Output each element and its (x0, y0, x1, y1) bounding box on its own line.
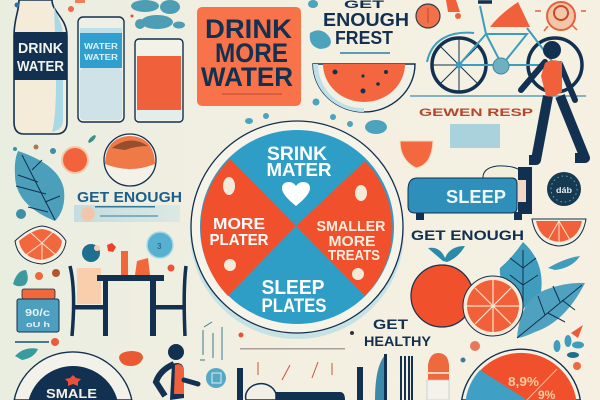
icon: water bottle (14, 0, 67, 134)
icon: fork (400, 356, 413, 400)
wheel left label: PLATER (210, 232, 269, 249)
heading: drink more water poster: WATER (201, 62, 293, 92)
icon: orange slice (463, 276, 523, 336)
pie chart: bottom right (462, 349, 580, 400)
decoration: leaves at top (14, 0, 185, 29)
wheel left label: MORE (213, 216, 265, 233)
wheel right label: SMALLER (316, 218, 386, 235)
wheel top label: SRINK (267, 144, 327, 165)
wheel top label (266, 144, 332, 180)
icon: bowl (104, 134, 156, 186)
icon: apple with leaves (411, 246, 473, 327)
icon: bed (408, 166, 532, 220)
icon: water glass: WATER (84, 53, 118, 62)
wheel right label: TREATS (328, 247, 380, 264)
icon: bicycle (410, 2, 586, 96)
icon: red heart blob (119, 351, 143, 366)
heading: drink more water poster (197, 7, 301, 106)
icon: heart (282, 182, 310, 206)
decorative dots left (13, 134, 116, 262)
icon: grapefruit half left (15, 226, 66, 264)
icon: leaf sprig (460, 325, 584, 370)
icon: jar with label: 90/c (25, 308, 51, 319)
icon: jar with label: oU h (26, 322, 50, 329)
icon: scale on bench (237, 367, 363, 400)
icon: salt shaker (427, 353, 450, 400)
wheel bottom label: PLATES (262, 296, 326, 317)
heading: get enough frest: FREST (335, 28, 393, 48)
icon: running person (156, 344, 198, 400)
icon: upper leaf right (500, 242, 542, 312)
decoration: blue blobs (245, 0, 387, 134)
decorative blobs bottom left (13, 269, 60, 360)
heading: get enough frest: ENOUGH (323, 10, 409, 30)
label: get enough right: GET ENOUGH (411, 227, 524, 243)
panel: center wheel (190, 121, 404, 339)
icon: knife (375, 354, 387, 400)
icon: water glass (78, 17, 124, 122)
icon: walking person (521, 41, 585, 160)
icon: water bottle: WATER (17, 58, 64, 75)
wheel right label: MORE (328, 233, 376, 250)
label: get enough left (74, 189, 182, 222)
icon: juice glass (135, 39, 183, 122)
label: get enough left: GET ENOUGH (77, 189, 182, 206)
wheel left label (210, 216, 269, 249)
icon: clock fruit (416, 4, 440, 28)
icon: orange circle (62, 147, 88, 173)
heading: get enough frest (323, 0, 409, 54)
icon: small watermelon (400, 141, 433, 168)
pie chart: bottom right: 8,9% (508, 374, 539, 389)
icon: water glass: WATER (84, 42, 118, 51)
wheel right label (316, 218, 386, 264)
icon: table and chairs (70, 251, 186, 336)
icon: water bottle: DRINK (18, 40, 63, 57)
wheel top label: MATER (266, 160, 332, 180)
wheel bottom label (262, 277, 326, 317)
icon: blue leaf left (15, 151, 64, 221)
icon: grapefruit wedge right (532, 219, 586, 246)
icon: blue round medallion (206, 368, 226, 388)
icon: watermelon slice (313, 64, 415, 112)
icon: bed: SLEEP (446, 187, 506, 207)
icon: blue badge circle: 3 (157, 242, 162, 251)
icon: small plate (14, 352, 132, 400)
caption: gewen resp: GEWEN RESP (419, 107, 533, 119)
decoration: red shapes top (446, 0, 461, 19)
icon: dark badge: dáb (556, 186, 572, 195)
label: get healthy (364, 316, 432, 349)
heading: drink more water poster: MORE (215, 38, 288, 68)
wheel bottom label: SLEEP (262, 277, 324, 299)
small leaf near bottom right (548, 256, 580, 270)
label: get healthy: GET (373, 316, 409, 332)
icon: sun target (535, 2, 586, 31)
icon: dark badge (547, 172, 581, 206)
caption: gewen resp (419, 107, 533, 148)
icon: jar with label (15, 289, 59, 343)
heading: drink more water poster: DRINK (205, 14, 293, 44)
decorative small tools (200, 322, 354, 380)
label: get healthy: HEALTHY (364, 333, 432, 349)
icon: blue badge circle (147, 232, 173, 258)
small food icons on wheel (223, 177, 367, 280)
icon: large leaf right (517, 283, 585, 338)
